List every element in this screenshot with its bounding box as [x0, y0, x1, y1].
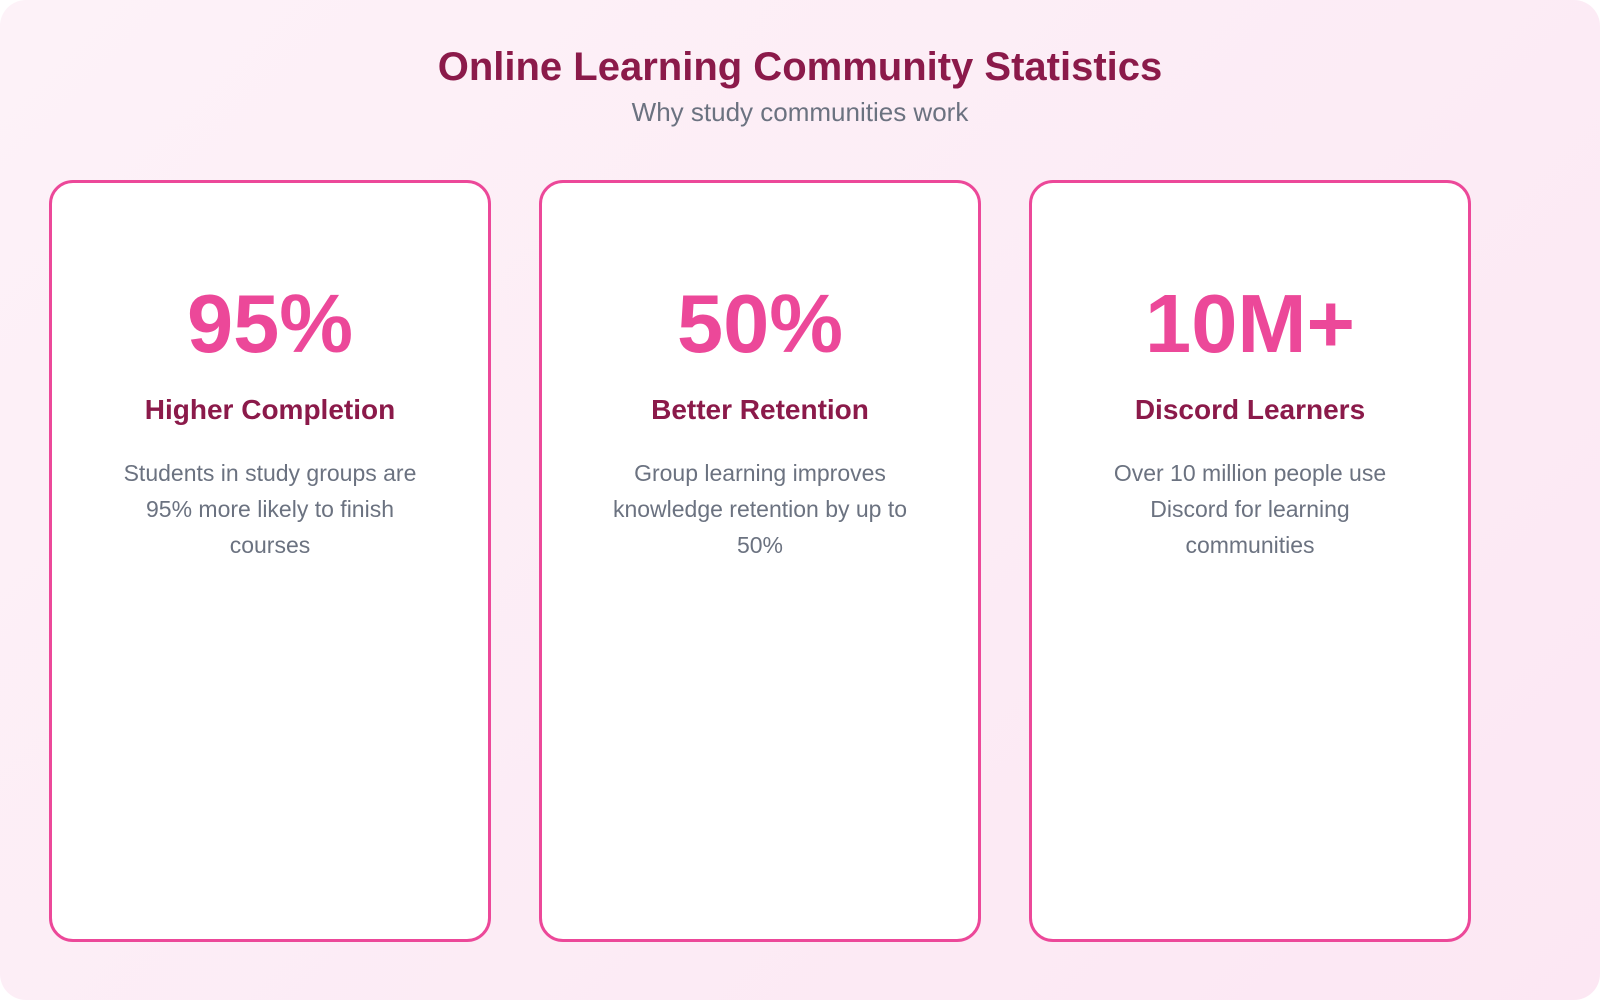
description: Students in study groups are 95% more likely to finish courses: [124, 460, 416, 558]
description: Group learning improves knowledge retention by up to 50%: [613, 460, 907, 558]
panel: discord learners: [1029, 180, 1471, 942]
panel: better retention: [539, 180, 981, 942]
stat number: 95%: [187, 277, 353, 370]
description: Over 10 million people use Discord for learning communities: [1114, 460, 1386, 558]
stat label: Better Retention: [651, 394, 869, 425]
subtitle: Why study communities work: [632, 97, 968, 127]
panel: higher completion: [49, 180, 491, 942]
stat label: Discord Learners: [1135, 394, 1365, 425]
title: Online Learning Community Statistics: [438, 45, 1162, 89]
stat label: Higher Completion: [145, 394, 395, 425]
stat number: 10M+: [1145, 277, 1355, 370]
stat number: 50%: [677, 277, 843, 370]
